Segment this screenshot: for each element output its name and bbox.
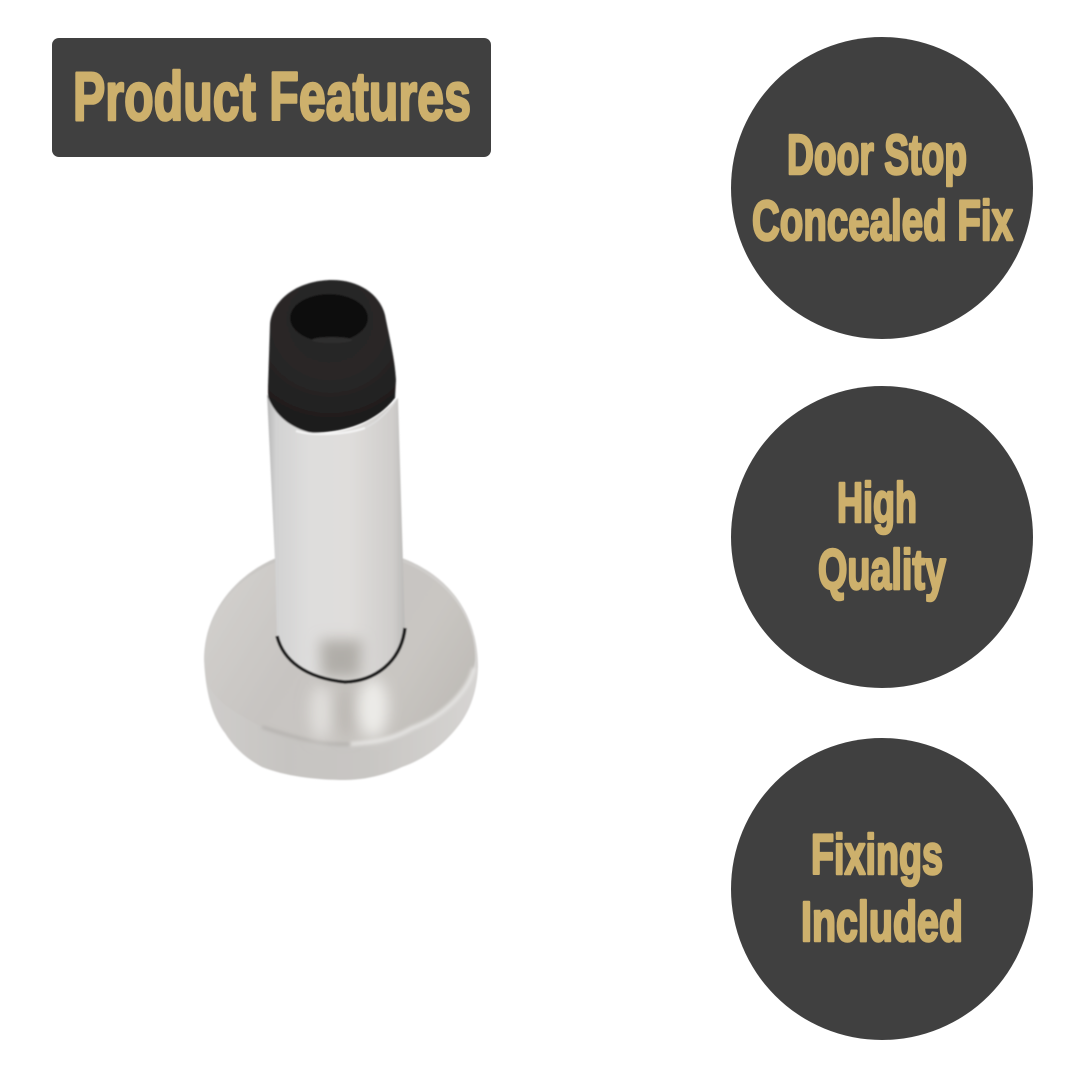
metal tube (267, 394, 405, 682)
base plate (204, 558, 478, 780)
title banner (52, 38, 491, 157)
badge text line 1: Fixings (811, 823, 943, 887)
badge text line 2: Quality (818, 538, 946, 602)
badge text line 1: Door Stop (787, 123, 967, 187)
feature badge: high quality (731, 386, 1033, 688)
product photo: door stop (204, 280, 478, 780)
badge text line 1: High (837, 471, 917, 535)
title text: Product Features (73, 58, 471, 135)
feature badge: fixings included (731, 738, 1033, 1040)
badge text line 2: Included (801, 890, 963, 954)
feature badge: door stop concealed fix (731, 37, 1033, 339)
rubber tip (268, 280, 396, 434)
